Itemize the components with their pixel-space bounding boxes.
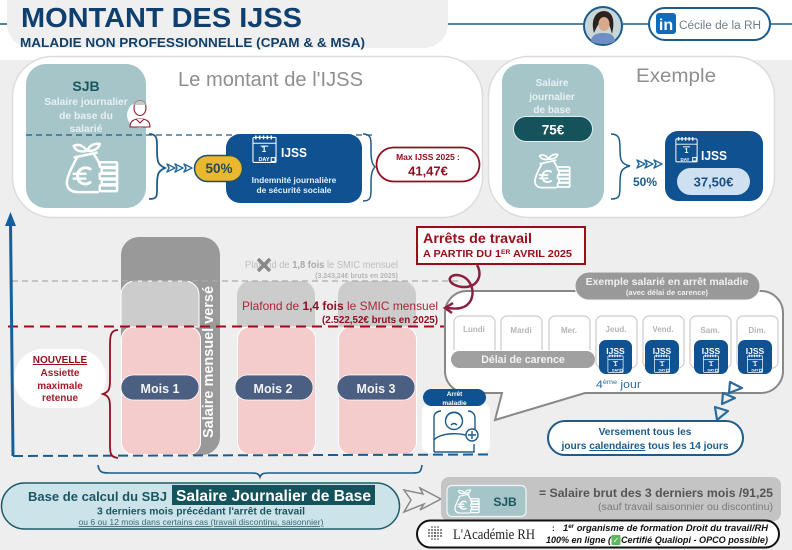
- callout: arrêts de travail: [417, 227, 585, 264]
- subtitle: MALADIE NON PROFESSIONNELLE (CPAM & & MSA): [20, 36, 365, 50]
- day: mercredi: [549, 316, 590, 350]
- heading pill: [575, 272, 760, 300]
- arrow: curly link to ceiling: [445, 265, 479, 313]
- pill: mois 1: [121, 375, 199, 400]
- day: samedi: [690, 316, 731, 368]
- icon: employee: [127, 100, 153, 128]
- label: 4ème jour: ème: [603, 379, 617, 386]
- card: SJB: [26, 64, 146, 208]
- callout: nouvelle assiette: retenue: [42, 393, 78, 404]
- icon: author portrait: [584, 7, 622, 45]
- pill: mois 2: Mois 2: [254, 382, 292, 396]
- card: IJSS: [226, 134, 362, 203]
- day: dimanche: Dim.: [748, 326, 766, 335]
- bottom brace: [98, 465, 422, 477]
- callout: arrêts de travail: ER: [501, 249, 511, 256]
- IJSS tile: jeudi: 1: [614, 362, 618, 368]
- day: vendredi: [643, 316, 684, 368]
- day: samedi: Sam.: [700, 326, 720, 335]
- author name: Cécile de la RH: [679, 20, 761, 32]
- callout: versement: jours calendaires tous les 14 jours: [560, 441, 729, 452]
- callout: nouvelle assiette: maximale: [37, 381, 83, 392]
- IJSS tile: vendredi: 1: [660, 362, 664, 368]
- day: lundi: [454, 316, 495, 350]
- card: salaire journalier: de base: [533, 105, 571, 116]
- card: IJSS exemple: [665, 131, 763, 201]
- tagline: :: [552, 524, 555, 533]
- bar: mois 2: [237, 281, 316, 454]
- brace: [149, 134, 165, 199]
- panel: exemple: [488, 56, 774, 218]
- icon: linkedin: in: [659, 17, 673, 34]
- callout: arrêts de travail: AVRIL 2025: [510, 248, 572, 260]
- tagline: 100% en ligne (: [546, 535, 612, 545]
- day: lundi: Lundi: [463, 325, 485, 334]
- IJSS tile: vendredi: [645, 340, 679, 374]
- callout: arrêts de travail: Arrêts de travail: [423, 230, 532, 246]
- icon: calendar: DAY: [680, 157, 690, 162]
- old ceiling label: [245, 260, 398, 280]
- panel: formule SJB: (sauf travail saisonnier ou discontinu): [598, 502, 773, 513]
- value pill: [514, 116, 592, 142]
- callout: nouvelle assiette: Assiette: [41, 368, 80, 379]
- IJSS tile: dimanche: DAY: [751, 368, 759, 372]
- IJSS tile: vendredi: DAY: [658, 368, 666, 372]
- bar: salaire mensuel versé: [121, 237, 220, 455]
- IJSS tile: dimanche: IJSS: [746, 346, 765, 356]
- label pill: maladie: [442, 400, 467, 407]
- IJSS tile: jeudi: DAY: [612, 368, 620, 372]
- footer: L'Académie RH: [417, 520, 779, 548]
- panel: formule SJB: [441, 477, 781, 521]
- icon: calendar: 1: [262, 145, 267, 154]
- card: SJB: salarié: [70, 124, 103, 135]
- callout: nouvelle assiette: [14, 349, 106, 408]
- arrows: toward versement: [715, 382, 742, 420]
- badge: 50%: 50%: [205, 161, 233, 176]
- badge: 50%: [194, 156, 242, 182]
- label: 4ème jour: jour: [617, 379, 641, 391]
- panel: base de calcul: [2, 483, 400, 529]
- day: dimanche: [737, 316, 778, 368]
- pill: mois 3: Mois 3: [357, 382, 395, 396]
- card: SJB: SJB: [72, 78, 100, 94]
- callout: arrêts de travail: A PARTIR DU 1: [423, 248, 498, 260]
- day: jeudi: Jeud.: [606, 325, 626, 334]
- card: IJSS exemple: IJSS: [701, 149, 727, 163]
- label pill: [423, 389, 486, 407]
- card: salaire journalier: journalier: [528, 92, 575, 103]
- icon: calendar: [253, 136, 276, 163]
- callout: max IJSS: Max IJSS 2025 :: [396, 152, 460, 162]
- bar label: salaire mensuel versé: Salaire mensuel versé: [201, 286, 217, 438]
- bar: mois 1: [121, 281, 200, 454]
- old ceiling label: (3.243,24€ bruts en 2025): [315, 273, 398, 280]
- chip: SJB: [447, 486, 526, 516]
- tagline: [546, 523, 769, 545]
- panel heading: Exemple: [636, 66, 716, 87]
- pill: mois 3: [337, 375, 415, 400]
- bar: mois 3: [338, 281, 416, 454]
- brace right: [363, 134, 375, 201]
- card: IJSS: IJSS: [281, 146, 307, 160]
- header: title block: [7, 0, 448, 50]
- old ceiling label: Plafond de 1,8 fois le SMIC mensuel: [245, 260, 398, 271]
- IJSS tile: jeudi: IJSS: [606, 346, 625, 356]
- panel: base de calcul: ou 6 ou 12 mois dans certains cas (travail discontinu, saisonnier): [78, 517, 324, 527]
- axis arrow: [5, 212, 16, 456]
- callout: nouvelle assiette: NOUVELLE: [33, 355, 88, 366]
- icon: dotted logo: [428, 526, 442, 540]
- brace: [611, 134, 630, 199]
- red brace: [103, 330, 118, 458]
- icon: crossed out: [258, 259, 270, 271]
- callout: max IJSS: 41,47€: [408, 164, 448, 178]
- IJSS tile: dimanche: 1: [753, 362, 757, 368]
- card: SJB: de base du: [59, 111, 113, 122]
- card: salaire journalier: Salaire: [536, 78, 569, 89]
- icon: patient in bed: [434, 411, 478, 452]
- icon: money bag: [535, 154, 570, 188]
- callout: versement: Versement tous les: [599, 427, 692, 438]
- IJSS tile: samedi: 1: [709, 362, 713, 368]
- callout: max IJSS: [376, 148, 480, 182]
- new ceiling label: Plafond de 1,4 fois le SMIC mensuel: [242, 299, 438, 313]
- linkedin badge: [649, 8, 770, 40]
- day: mercredi: Mer.: [561, 326, 577, 335]
- panel: base de calcul: Base de calcul du SBJ: [28, 490, 167, 504]
- arrows: [167, 164, 192, 172]
- label: délai de carence: Délai de carence: [481, 354, 565, 366]
- tagline: Certifié Qualiopi - OPCO possible): [621, 535, 768, 545]
- IJSS tile: jeudi: [599, 340, 632, 374]
- tagline: 1: [563, 523, 568, 533]
- value pill: 75€: [542, 122, 565, 138]
- icon: calendar: DAY: [258, 157, 270, 163]
- pill: mois 1: Mois 1: [141, 382, 179, 396]
- panel: le montant de l'IJSS: [12, 56, 482, 218]
- chart: assiette des 3 mois: [5, 212, 490, 458]
- chip: SJB: SJB: [493, 495, 517, 509]
- card: IJSS: de sécurité sociale: [257, 185, 332, 195]
- tagline: ✓: [613, 536, 619, 545]
- icon: money bag: [67, 144, 117, 192]
- day: jeudi: [596, 316, 637, 368]
- card: IJSS: Indemnité journalière: [252, 175, 337, 185]
- IJSS tile: samedi: DAY: [707, 368, 715, 372]
- panel heading: Le montant de l'IJSS: [178, 69, 363, 91]
- day: vendredi: Vend.: [652, 325, 674, 334]
- label: délai de carence: [451, 351, 595, 368]
- speech bubble: exemple salarié: [445, 272, 783, 420]
- IJSS tile: vendredi: IJSS: [653, 346, 672, 356]
- tagline: er: [568, 524, 575, 530]
- IJSS tile: samedi: IJSS: [702, 346, 721, 356]
- heading pill: (avec délai de carence): [626, 288, 709, 297]
- logo wordmark: L'Académie RH: [453, 527, 535, 543]
- IJSS tile: samedi: [694, 340, 728, 374]
- label: 4ème jour: 4: [596, 379, 602, 391]
- label pill: Arrêt: [447, 391, 463, 398]
- label: 50%: 50%: [633, 175, 657, 189]
- icon: calendar: [676, 137, 697, 162]
- new ceiling label: [242, 299, 438, 326]
- card: salaire journalier: [502, 64, 604, 208]
- new ceiling label: (2.522,52€ bruts en 2025): [322, 315, 438, 326]
- highlighted term: Salaire Journalier de Base: [176, 488, 371, 505]
- icon: calendar: 1: [685, 148, 689, 155]
- card: SJB: Salaire journalier: [44, 97, 128, 108]
- arrow: to SJB formula: [404, 488, 441, 512]
- pill: mois 2: [235, 375, 313, 400]
- heading pill: Exemple salarié en arrêt maladie: [586, 276, 749, 288]
- callout: versement: [548, 421, 743, 455]
- day: mardi: [501, 316, 542, 350]
- IJSS tile: dimanche: [738, 340, 772, 374]
- title: MONTANT DES IJSS: [21, 2, 302, 33]
- panel: base de calcul: 3 derniers mois précédant l'arrêt de travail: [97, 506, 305, 518]
- tagline: organisme de formation Droit du travail/RH: [574, 523, 769, 533]
- arrêt maladie block: [422, 389, 490, 453]
- arrows: [637, 160, 662, 168]
- value pill: 37,50€: [694, 174, 733, 190]
- day: mardi: Mardi: [510, 326, 532, 335]
- panel: formule SJB: = Salaire brut des 3 derniers mois /91,25: [539, 486, 773, 500]
